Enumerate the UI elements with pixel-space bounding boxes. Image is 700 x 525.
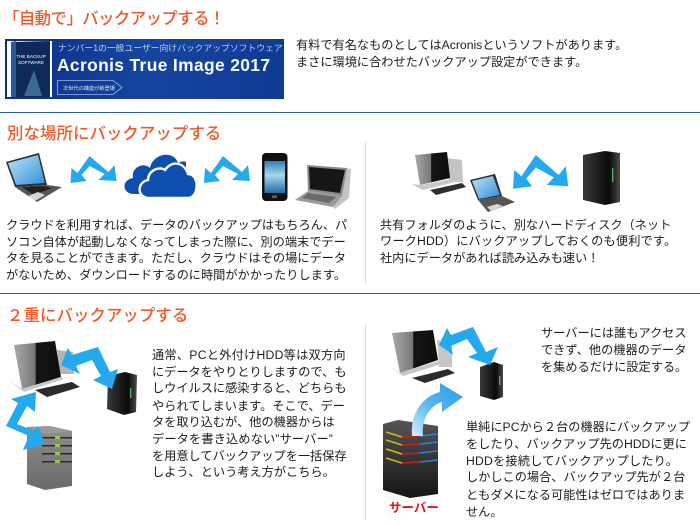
text: cloud description: タを見ることができます。ただし、クラウドはその場にデータ — [6, 251, 346, 265]
arrow: PC to server — [6, 392, 45, 450]
text: double backup explanation: しよう、という考え方がこちら。 — [152, 465, 335, 479]
icon: black server — [383, 420, 438, 498]
text: cloud description: がないため、ダウンロードするのに時間がかかったりします。 — [6, 268, 346, 282]
text: double backup explanation: を用意してバックアップを一括保存 — [152, 449, 347, 463]
text: two-device backup caveat: ともダメになる可能性はゼロではありま — [466, 488, 685, 502]
heading: backup to another location: 別な場所にバックアップする — [7, 125, 221, 143]
banner: Acronis True Image 2017: Acronis True Image 2017 — [57, 55, 270, 75]
text: two-device backup caveat — [466, 420, 690, 519]
text: double backup explanation: データを書き込めない”サーバー” — [152, 432, 333, 446]
text: shared folder description: ワークHDD）にバックアップしておくのも便利です。 — [380, 234, 676, 248]
arrow: double-headed — [70, 156, 116, 183]
banner: Acronis True Image 2017: 次世代の機能が新登場 — [63, 84, 115, 92]
icon: external HDD tower (right) — [480, 362, 503, 400]
text: cloud description: クラウドを利用すれば、データのバックアップはもちろん、パ — [6, 218, 347, 232]
heading: double backup: ２重にバックアップする — [7, 307, 188, 325]
text: two-device backup caveat: 単純にPCから２台の機器にバックアップ — [466, 420, 690, 434]
arrow: PC to HDD (right) — [439, 327, 498, 365]
text: double backup explanation — [152, 348, 347, 479]
text: cloud description — [6, 218, 347, 282]
text: server setting note: できず、他の機器のデータ — [541, 343, 686, 357]
icon: laptop (dark screen) — [295, 165, 351, 209]
text: double backup explanation: 通常、PCと外付けHDD等は双方向 — [152, 348, 346, 362]
icon: desktop PC — [411, 152, 466, 195]
text: two-device backup caveat: しかしこの場合、バックアップ先が２台 — [466, 470, 685, 484]
text: two-device backup caveat: HDDを接続してバックアップしたり。 — [466, 454, 678, 468]
arrow: curved server to HDD — [412, 383, 463, 436]
text: shared folder description — [380, 218, 676, 265]
text: server setting note: サーバーには誰もアクセス — [541, 326, 687, 340]
icon: external HDD tower — [583, 151, 620, 205]
heading: automatic backup: 「自動で」バックアップする！ — [3, 10, 225, 28]
text: Acronis description: まさに環境に合わせたバックアップ設定ができます。 — [296, 55, 587, 69]
text: shared folder description: 共有フォルダのように、別なハードディスク（ネット — [380, 218, 671, 232]
arrow: double-headed — [204, 156, 250, 183]
text: Acronis description — [296, 38, 627, 69]
arrow: double-headed — [513, 155, 568, 189]
banner: Acronis True Image 2017: SOFTWARE — [18, 60, 44, 65]
text: Acronis description: 有料で有名なものとしてはAcronisというソフトがあります。 — [296, 38, 627, 52]
icon: rack server — [27, 426, 72, 490]
text: two-device backup caveat: せん。 — [466, 505, 503, 519]
icon: laptop (blue screen, shared) — [470, 174, 515, 212]
arrow: PC to HDD — [61, 347, 118, 389]
text: cloud description: ソコン自体が起動しなくなってしまった際に、別の端末でデー — [6, 235, 346, 249]
label: server: サーバー — [389, 501, 439, 515]
banner: Acronis True Image 2017 — [5, 39, 284, 99]
icon: smartphone — [262, 153, 288, 201]
icon: laptop (blue screen) — [6, 153, 62, 202]
banner: Acronis True Image 2017: ナンバー1の一般ユーザー向けバックアップソフトウェア — [58, 42, 283, 53]
icon: external HDD tower — [107, 372, 137, 415]
text: double backup explanation: タを取り込むが、他の機器からは — [152, 415, 335, 429]
text: shared folder description: 社内にデータがあれば読み込みも速い！ — [380, 251, 599, 265]
text: two-device backup caveat: をしたり、バックアップ先のHDDに更に — [466, 437, 687, 451]
text: server setting note: を集めるだけに設定する。 — [541, 360, 687, 374]
text: server setting note — [541, 326, 687, 374]
icon: desktop PC (large) — [9, 341, 80, 397]
text: double backup explanation: にデータをやりとりしますので、も — [152, 365, 347, 379]
banner: Acronis True Image 2017: THE BACKUP — [16, 54, 46, 59]
text: double backup explanation: やられてしまいます。そこで、デー — [152, 399, 345, 413]
text: double backup explanation: しウイルスに感染すると、どちらも — [152, 381, 347, 395]
icon: cloud — [124, 155, 197, 198]
icon: desktop PC (right) — [388, 330, 455, 383]
